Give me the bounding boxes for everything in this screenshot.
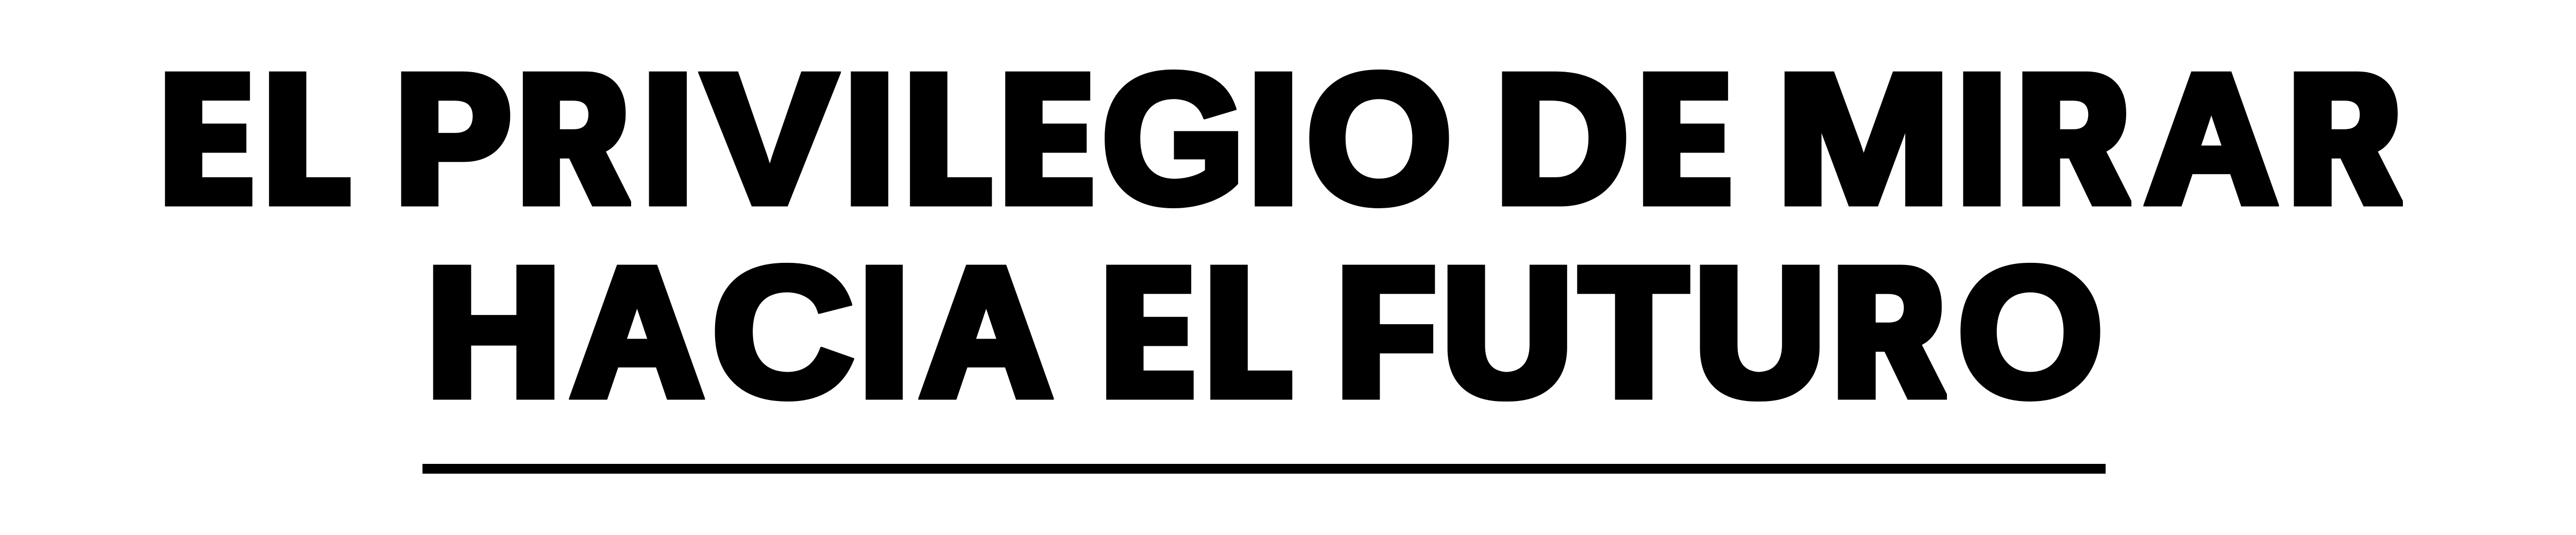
- title line 2: C: [711, 230, 854, 434]
- title line 1: L: [271, 37, 344, 241]
- title line 1: [165, 37, 2403, 402]
- title line 1: R: [2021, 37, 2125, 241]
- title line 1: P: [396, 37, 510, 241]
- title line 2: A: [572, 230, 703, 434]
- title line 1: V: [703, 37, 836, 241]
- title line 1: O: [1306, 37, 1452, 241]
- title line 2: T: [1582, 230, 1686, 434]
- title line 1: D: [1495, 37, 1628, 241]
- title line 1: I: [1961, 37, 2003, 241]
- title: [165, 37, 2403, 434]
- title line 1: I: [849, 37, 891, 241]
- title line 1: E: [1645, 37, 1725, 241]
- title line 2: L: [1212, 230, 1286, 434]
- title line 2: A: [921, 230, 1052, 434]
- title line 1: I: [647, 37, 689, 241]
- title line 2: [426, 230, 2104, 434]
- title line 2: F: [1340, 230, 1432, 434]
- title line 2: R: [1837, 230, 1941, 434]
- title line 2: E: [1108, 230, 1188, 434]
- title line 1: R: [521, 37, 625, 241]
- title line 2: I: [863, 230, 905, 434]
- title line 1: R: [2293, 37, 2397, 241]
- title line 2: O: [1957, 230, 2104, 434]
- title line 1: G: [1101, 37, 1245, 241]
- title line 2: U: [1443, 230, 1572, 434]
- title line 1: L: [912, 37, 986, 241]
- title line 1: E: [167, 37, 247, 241]
- title line 1: E: [1007, 37, 1087, 241]
- title line 2: U: [1695, 230, 1825, 434]
- underline rule: [422, 464, 2106, 474]
- title line 1: M: [1775, 37, 1952, 241]
- title line 1: I: [1252, 37, 1295, 241]
- title line 1: A: [2146, 37, 2277, 241]
- title line 2: H: [426, 230, 562, 434]
